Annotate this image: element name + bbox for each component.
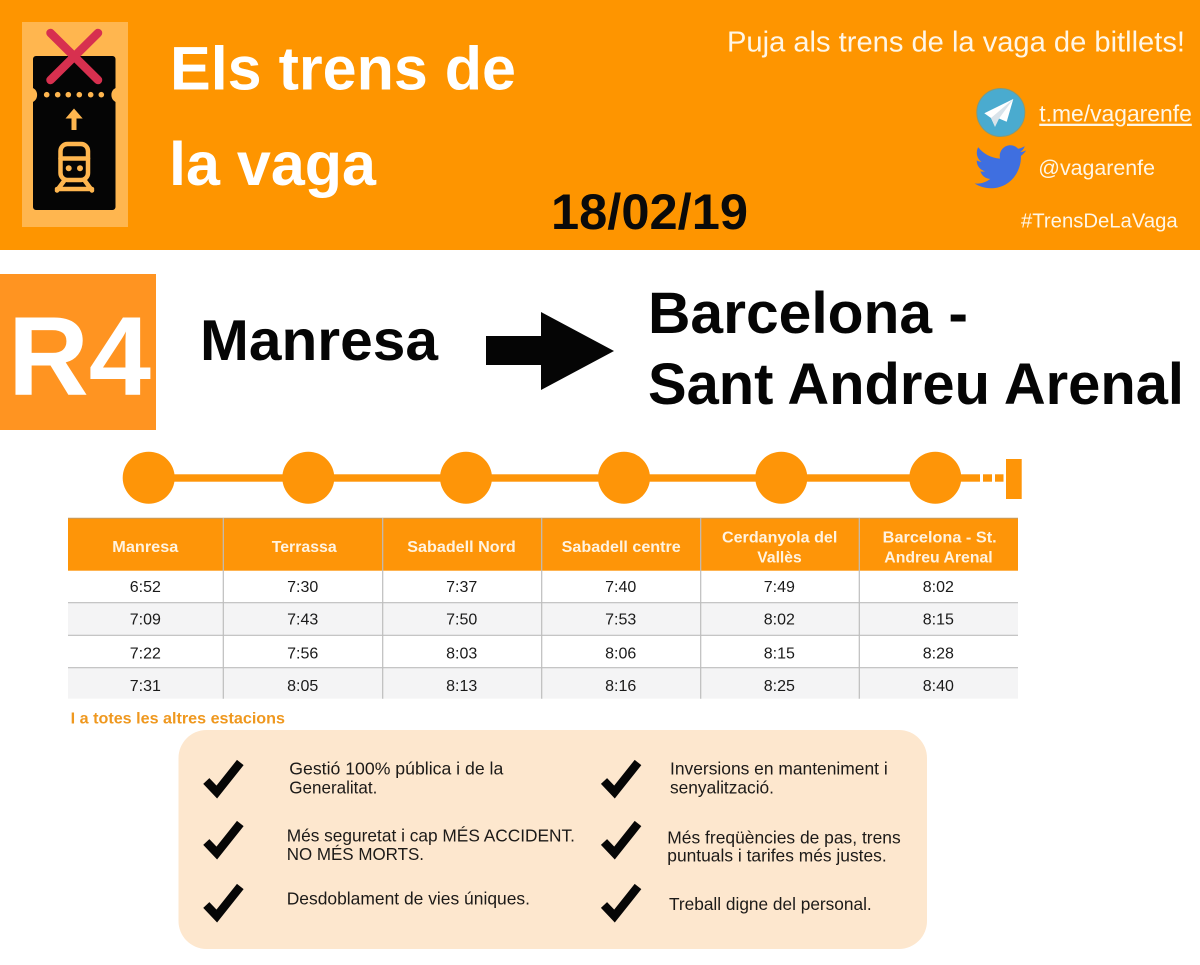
demand: public management <box>206 758 503 797</box>
demand: safety <box>206 824 575 864</box>
icon: twitter bird <box>975 145 1026 188</box>
table header row: Sabadell centre <box>562 539 681 556</box>
table row 2: 7:09 <box>130 612 161 628</box>
table row 4: 8:40 <box>923 678 954 695</box>
icon: cancelled train ticket <box>22 22 128 227</box>
hashtag: #TrensDeLaVaga <box>1021 210 1179 232</box>
date: 18/02/19 <box>551 184 748 240</box>
demand: investment <box>604 758 888 797</box>
table row 4: 8:13 <box>446 678 477 695</box>
demand: public management: Generalitat. <box>289 777 377 797</box>
header band <box>0 0 1200 250</box>
demand: decent work <box>604 886 872 916</box>
route line with stations <box>123 452 1022 504</box>
icon: telegram <box>977 88 1025 136</box>
demand: double tracks <box>206 886 530 916</box>
table row 2 <box>130 612 954 628</box>
table header row: Terrassa <box>272 539 337 556</box>
demand: decent work: Treball digne del personal. <box>669 894 872 914</box>
table header row <box>112 529 997 566</box>
table header row: Barcelona - St. <box>883 529 997 546</box>
table row 2: 7:53 <box>605 612 636 628</box>
table header row: Cerdanyola del <box>722 529 837 546</box>
telegram link: t.me/vagarenfe <box>1039 101 1192 127</box>
demand: investment: senyalització. <box>670 777 774 797</box>
timetable <box>68 518 1018 699</box>
table row 3: 8:28 <box>923 645 954 662</box>
table row 3: 8:06 <box>605 645 636 662</box>
title <box>169 34 516 198</box>
table row 4: 7:31 <box>130 678 161 695</box>
table row 3: 8:15 <box>764 645 795 662</box>
table row 1: 7:30 <box>287 579 318 596</box>
demand: public management: Gestió 100% pública i de la <box>289 758 503 778</box>
table row 3: 8:03 <box>446 645 477 662</box>
table header row: Vallès <box>757 549 802 566</box>
table header row: Sabadell Nord <box>407 539 516 556</box>
footnote: I a totes les altres estacions <box>71 710 285 727</box>
table row 3: 7:56 <box>287 645 318 662</box>
destination station: Sant Andreu Arenal <box>648 352 1184 417</box>
table row 2: 7:50 <box>446 612 477 628</box>
slogan: Puja als trens de la vaga de bitllets! <box>727 27 1185 59</box>
destination station: Barcelona - <box>648 281 968 346</box>
demand: double tracks: Desdoblament de vies úniques. <box>287 888 530 908</box>
demand: safety: NO MÉS MORTS. <box>287 844 424 864</box>
table row 4: 8:05 <box>287 678 318 695</box>
origin station: Manresa <box>200 309 439 373</box>
title: Els trens de <box>170 34 516 102</box>
table row 1: 7:37 <box>446 579 477 596</box>
table row 3: 7:22 <box>130 645 161 662</box>
route badge R4: R4 <box>8 294 151 419</box>
demand: frequency and fares: puntuals i tarifes més justes. <box>667 846 887 866</box>
panel: demands <box>178 730 927 949</box>
twitter handle: @vagarenfe <box>1038 156 1155 180</box>
table row 2: 8:15 <box>923 612 954 628</box>
table row 2: 7:43 <box>287 612 318 628</box>
demand: frequency and fares: Més freqüències de pas, trens <box>667 827 901 847</box>
table row 4: 8:16 <box>605 678 636 695</box>
table row 1: 6:52 <box>130 579 161 596</box>
table row 4 <box>130 678 954 695</box>
table row 3 <box>130 645 954 662</box>
table row 2: 8:02 <box>764 612 795 628</box>
demand: investment: Inversions en manteniment i <box>670 758 888 778</box>
table row 1 <box>130 579 954 596</box>
table row 1: 8:02 <box>923 579 954 596</box>
title: la vaga <box>169 130 377 198</box>
demand: frequency and fares <box>604 824 901 866</box>
table header row: Andreu Arenal <box>884 549 993 566</box>
table row 1: 7:40 <box>605 579 636 596</box>
arrow <box>486 312 614 390</box>
table row 4: 8:25 <box>764 678 795 695</box>
destination station <box>648 281 1184 417</box>
table row 1: 7:49 <box>764 579 795 596</box>
demand: safety: Més seguretat i cap MÉS ACCIDENT. <box>287 825 575 845</box>
table header row: Manresa <box>112 539 178 556</box>
